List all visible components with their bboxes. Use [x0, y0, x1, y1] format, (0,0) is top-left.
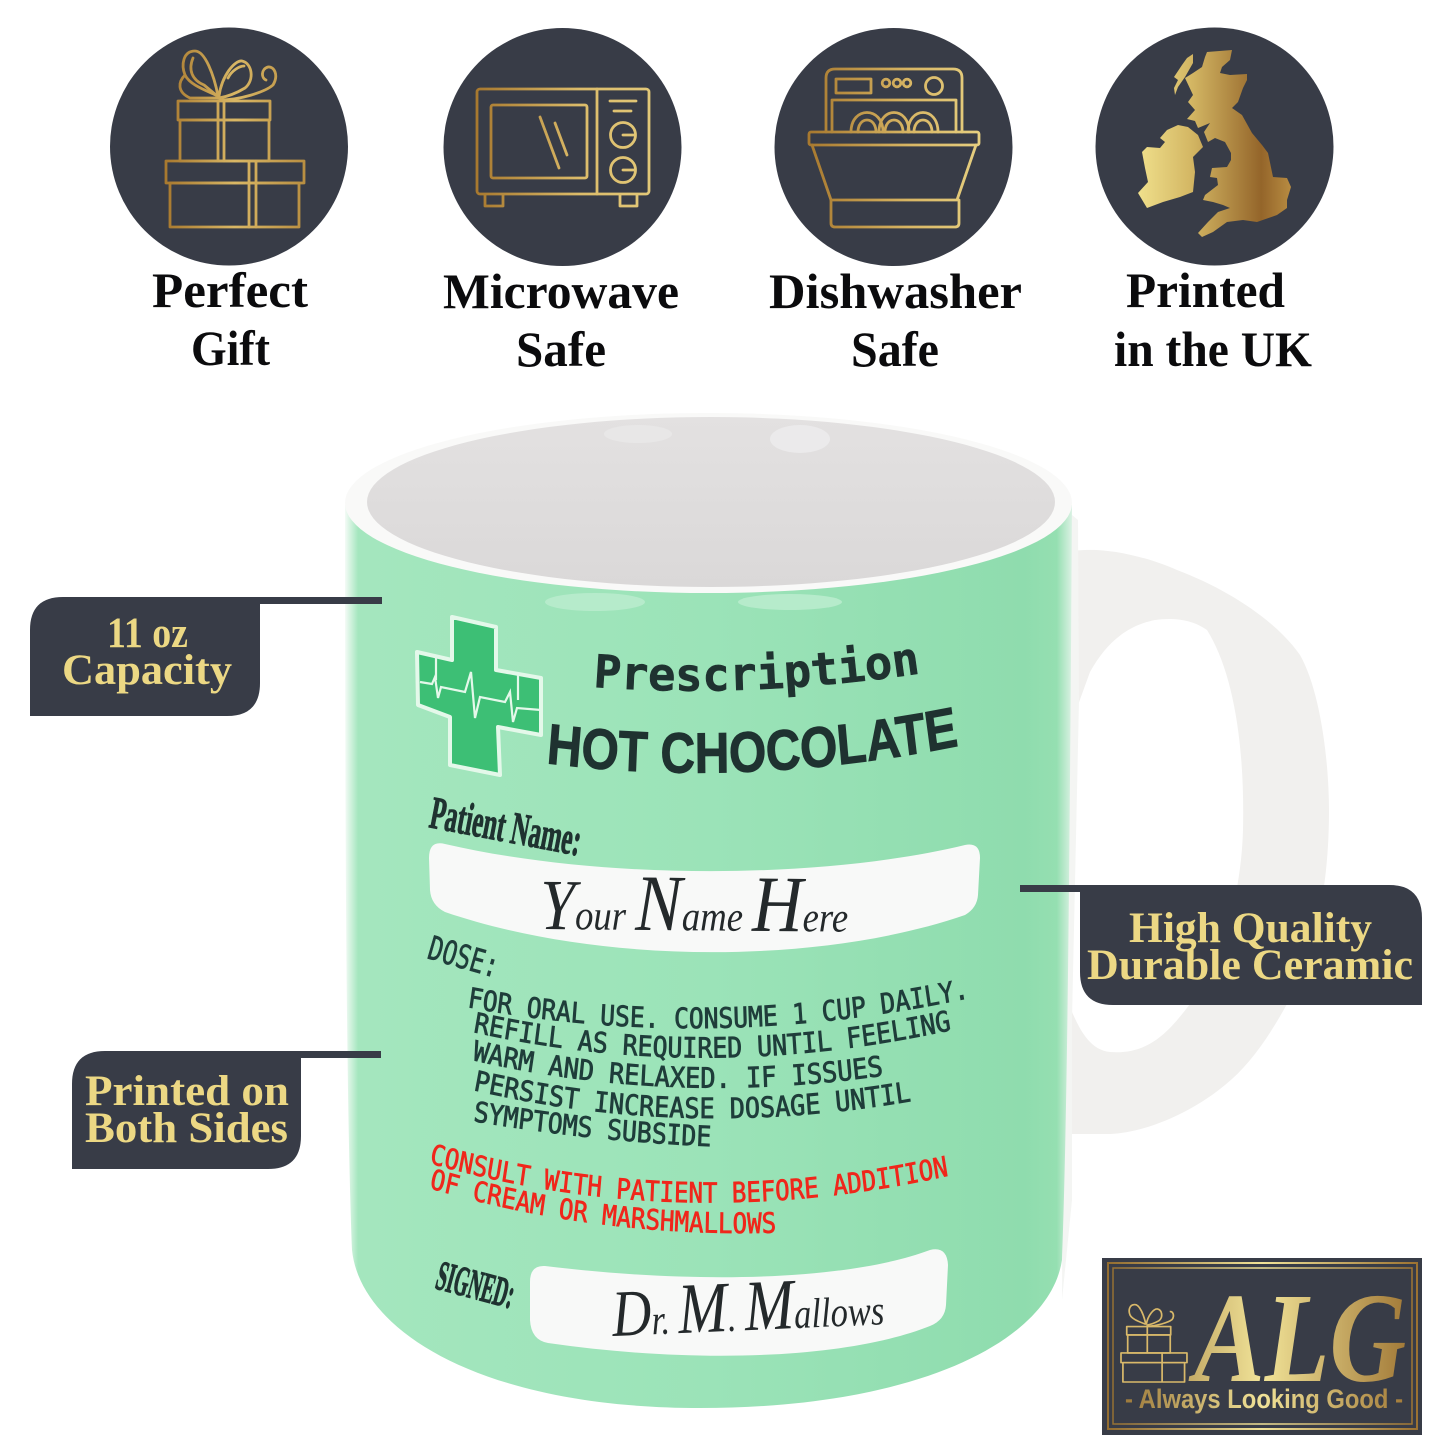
icon: dishwasher safe badge: [774, 28, 1012, 266]
label: Printed in the UK: Printed: [1126, 262, 1285, 318]
icon: perfect gift badge: [110, 28, 348, 266]
mug heading: HOT CHOCOLATE: HOT CHOCOLATE: [548, 707, 958, 774]
icon: green medical cross: [417, 617, 541, 775]
callout: Printed on Both Sides: Both Sides: [85, 1105, 288, 1152]
logo gift icon: [1121, 1305, 1187, 1382]
dose instructions: WARM AND RELAXED. IF ISSUES: [474, 1040, 882, 1088]
script text: Your Name Here: Your Name Here: [540, 859, 849, 950]
callout: Printed on Both Sides: Printed on: [85, 1068, 289, 1115]
red warning text: CONSULT WITH PATIENT BEFORE ADDITION: [432, 1144, 948, 1203]
mug body: [345, 505, 1072, 1408]
label: Perfect Gift: Perfect: [152, 262, 308, 318]
icon: microwave safe badge: [444, 28, 682, 266]
dose instructions: FOR ORAL USE. CONSUME 1 CUP DAILY.: [469, 980, 964, 1029]
dose label: DOSE:: [424, 928, 504, 986]
callout: High Quality Durable Ceramic: High Quality: [1129, 905, 1372, 952]
callout: High Quality Durable Ceramic: Durable Ceramic: [1087, 942, 1413, 989]
label: Microwave Safe: Safe: [516, 321, 606, 377]
glaze highlights: [545, 593, 842, 611]
red warning text: OF CREAM OR MARSHMALLOWS: [432, 1169, 775, 1234]
label: Perfect Gift: [152, 262, 308, 376]
dose instructions: SYMPTOMS SUBSIDE: [474, 1101, 710, 1147]
callout: High Quality Durable Ceramic: [1020, 885, 1422, 1005]
mug product photo: SIGNED:: [431, 1253, 520, 1318]
icon: dishwasher: [809, 69, 979, 227]
logo tagline: - Always Looking Good -: [1125, 1384, 1403, 1414]
label: Printed in the UK: [1114, 262, 1312, 377]
script text: Dr. M. Mallows: Dr. M. Mallows: [609, 1260, 885, 1352]
dose instructions: [469, 980, 964, 1147]
logo: Always Looking Good: [1102, 1258, 1422, 1435]
icon: map of UK and Ireland: [1138, 50, 1291, 237]
red warning text: [432, 1144, 948, 1234]
label: Perfect Gift: Gift: [191, 320, 270, 376]
label: Microwave Safe: [443, 263, 679, 377]
signature box: [530, 1249, 948, 1356]
mug handle: [1060, 510, 1329, 1300]
patient name box: [429, 843, 980, 952]
mug heading: Prescription: Prescription: [596, 644, 918, 698]
icon: stacked gift boxes: [166, 51, 304, 227]
icon: printed in the UK badge: [1096, 28, 1334, 266]
mug interior: [367, 417, 1055, 587]
label: Printed in the UK: in the UK: [1114, 321, 1312, 377]
callout: 11 oz Capacity: [30, 597, 382, 716]
mug product photo: [345, 417, 1329, 1408]
label: Dishwasher Safe: Safe: [851, 321, 939, 377]
label: Dishwasher Safe: [769, 263, 1022, 377]
label: Dishwasher Safe: Dishwasher: [769, 263, 1022, 319]
mug rim: [345, 413, 1072, 593]
patient name label: Patient Name:: [426, 787, 586, 865]
logo monogram: ALG: [1188, 1267, 1406, 1409]
callout: 11 oz Capacity: 11 oz: [107, 610, 188, 657]
dose instructions: REFILL AS REQUIRED UNTIL FEELING: [474, 1010, 950, 1061]
callout: Printed on Both Sides: [72, 1051, 381, 1169]
dose instructions: PERSIST INCREASE DOSAGE UNTIL: [475, 1070, 911, 1119]
icon: microwave: [477, 89, 649, 206]
callout: 11 oz Capacity: Capacity: [62, 647, 233, 694]
label: Microwave Safe: Microwave: [443, 263, 679, 319]
